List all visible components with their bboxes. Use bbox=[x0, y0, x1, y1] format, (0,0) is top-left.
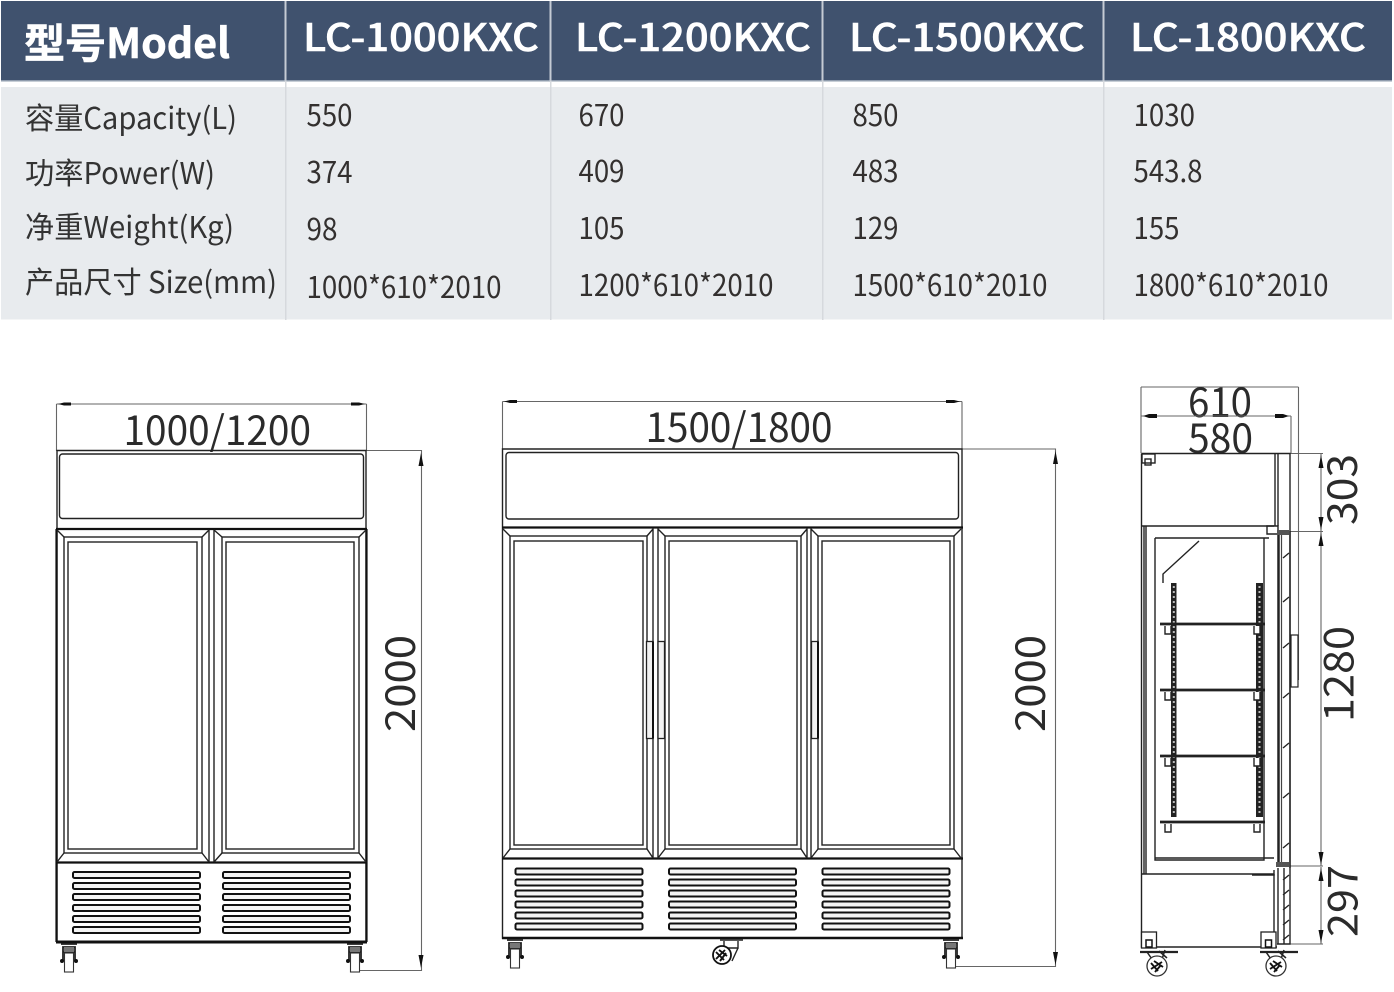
row: size: 产品尺寸 Size(mm) bbox=[25, 258, 277, 302]
width dimension 1500/1800 bbox=[502, 396, 962, 454]
door handles bbox=[646, 642, 819, 738]
dimension 303: 303 bbox=[1311, 454, 1369, 525]
shelf 2 bbox=[1160, 690, 1265, 700]
left glass door bbox=[503, 528, 653, 858]
row: power bbox=[25, 147, 1202, 193]
row: weight: 105 bbox=[578, 204, 624, 248]
header: LC-1000KXC: LC-1000KXC bbox=[303, 7, 539, 62]
centre swivel caster bbox=[713, 940, 743, 964]
shelf 4 bbox=[1160, 822, 1265, 832]
dimension 1280: 1280 bbox=[1308, 626, 1366, 722]
header: model label: 型号Model bbox=[24, 10, 230, 70]
shelf 3 bbox=[1160, 756, 1265, 766]
left caster bbox=[506, 940, 524, 968]
dimension 303 bbox=[1290, 454, 1369, 532]
front caster bbox=[1266, 950, 1286, 976]
dimension 610: 610 bbox=[1188, 371, 1252, 429]
row: capacity: 1030 bbox=[1134, 91, 1195, 135]
row: size: 1800*610*2010 bbox=[1134, 261, 1328, 305]
left louvers bbox=[516, 868, 642, 930]
table body bbox=[1, 81, 1392, 320]
shelf rails bbox=[1171, 583, 1263, 817]
dimension 580 bbox=[1141, 407, 1291, 465]
dimension 580: 580 bbox=[1188, 407, 1253, 465]
row: power: 543.8 bbox=[1134, 147, 1202, 191]
header: LC-1200KXC: LC-1200KXC bbox=[575, 7, 811, 62]
row: weight: 155 bbox=[1134, 204, 1180, 248]
height dimension 2000: 2000 bbox=[369, 635, 427, 732]
row: power: 功率Power(W) bbox=[25, 149, 215, 193]
row: capacity bbox=[25, 91, 1195, 138]
left glass door bbox=[57, 530, 209, 862]
dimension 297 bbox=[1290, 865, 1370, 944]
right caster bbox=[942, 940, 960, 968]
cabinet shell bbox=[1142, 454, 1290, 947]
width dimension 1000/1200 bbox=[56, 399, 366, 457]
row: size bbox=[25, 258, 1328, 307]
row: capacity: 850 bbox=[852, 91, 898, 135]
left louvers bbox=[73, 872, 200, 933]
width dimension 1500/1800: 1500/1800 bbox=[646, 396, 832, 454]
row: capacity: 容量Capacity(L) bbox=[25, 94, 237, 138]
rear caster bbox=[1147, 950, 1167, 976]
centre glass door bbox=[658, 528, 807, 858]
door handle bbox=[1291, 635, 1298, 687]
row: size: 1200*610*2010 bbox=[578, 261, 774, 305]
row: power: 374 bbox=[306, 148, 352, 192]
drawing: side section view bbox=[1140, 371, 1370, 976]
width dimension 1000/1200: 1000/1200 bbox=[124, 399, 311, 457]
row: size: 1500*610*2010 bbox=[852, 261, 1048, 305]
caster mounts bbox=[1140, 932, 1298, 952]
dimension 610 bbox=[1141, 371, 1298, 680]
shelf 1 bbox=[1160, 624, 1265, 634]
row: power: 409 bbox=[578, 147, 624, 191]
header: LC-1800KXC: LC-1800KXC bbox=[1130, 7, 1366, 62]
drawing: two-door cabinet front view bbox=[56, 399, 427, 972]
height dimension 2000: 2000 bbox=[999, 635, 1057, 732]
row: weight: 98 bbox=[306, 205, 338, 249]
cabinet body and sign panel bbox=[502, 449, 963, 938]
row: weight: 129 bbox=[852, 204, 898, 248]
table header band bbox=[1, 1, 1392, 82]
row: weight bbox=[25, 203, 1180, 249]
drawing: three-door cabinet front view bbox=[502, 396, 1058, 968]
right glass door bbox=[214, 530, 366, 862]
left caster bbox=[60, 944, 78, 972]
right caster bbox=[346, 944, 364, 972]
right louvers bbox=[223, 872, 350, 933]
height dimension 2000 bbox=[952, 449, 1058, 966]
row: capacity: 670 bbox=[578, 91, 624, 135]
right louvers bbox=[822, 868, 950, 930]
glass door section bbox=[1276, 530, 1290, 944]
header: LC-1500KXC: LC-1500KXC bbox=[849, 7, 1085, 62]
specification table bbox=[1, 1, 1392, 320]
cabinet body and sign panel bbox=[56, 450, 367, 942]
right glass door bbox=[811, 528, 961, 858]
dimension 1280 bbox=[1290, 532, 1366, 866]
dimension 297: 297 bbox=[1312, 865, 1370, 937]
centre louvers bbox=[669, 868, 796, 930]
row: power: 483 bbox=[852, 147, 898, 191]
height dimension 2000 bbox=[352, 450, 427, 970]
row: size: 1000*610*2010 bbox=[306, 263, 502, 307]
row: weight: 净重Weight(Kg) bbox=[25, 203, 234, 247]
row: capacity: 550 bbox=[306, 91, 352, 135]
